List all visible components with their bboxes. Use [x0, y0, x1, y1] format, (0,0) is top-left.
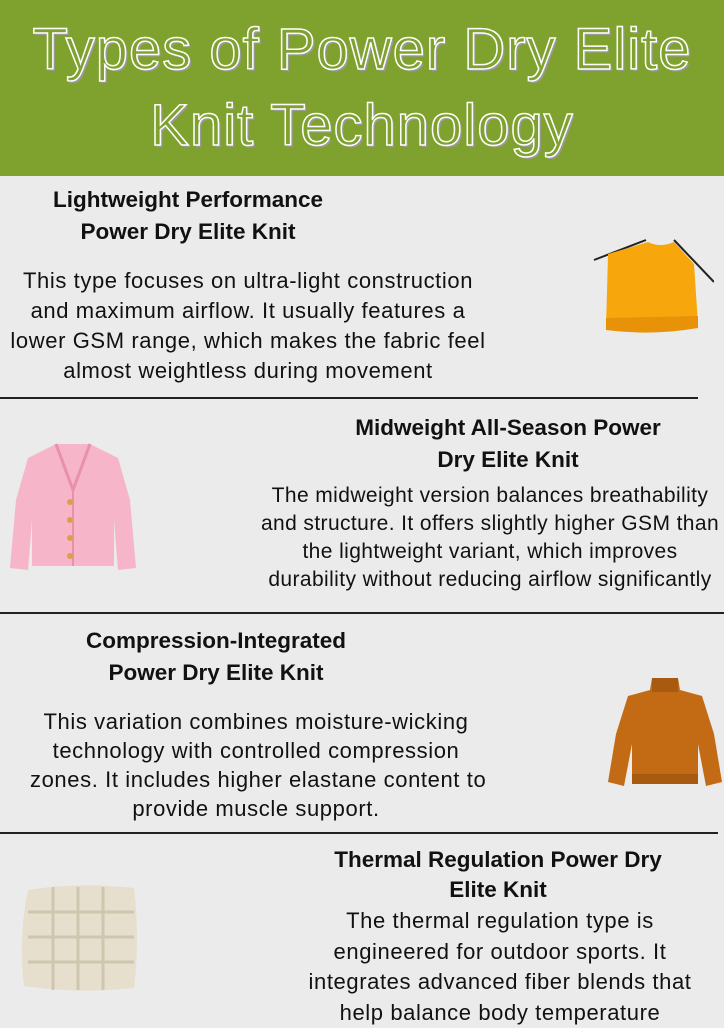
header banner: [0, 0, 724, 176]
title: Types of Power Dry Elite: [32, 17, 692, 82]
section 4 text: engineered for outdoor sports. It: [334, 938, 666, 964]
icon: beige fabric swatch: [22, 886, 137, 990]
section 4 heading: Thermal Regulation Power Dry: [334, 847, 662, 872]
section 2 text: and structure. It offers slightly higher GSM than: [261, 512, 719, 535]
section 4 text: integrates advanced fiber blends that: [308, 969, 692, 994]
section 4 heading: Elite Knit: [449, 877, 547, 902]
icon: knitting sweater with needles: [594, 239, 714, 333]
section 4 text: The thermal regulation type is: [346, 908, 654, 933]
section 1 text: [10, 268, 486, 383]
section 3 text: This variation combines moisture-wicking: [43, 709, 469, 734]
section 2 heading: [355, 415, 661, 472]
icon: pink cardigan: [10, 444, 136, 570]
section 3 text: zones. It includes higher elastane content to: [30, 767, 486, 792]
section 3 heading: Compression-Integrated: [86, 628, 346, 653]
section 1 heading: Lightweight Performance: [53, 187, 323, 212]
section 1 heading: [53, 187, 323, 244]
section 3 text: technology with controlled compression: [53, 738, 459, 763]
icon: brown turtleneck sweater: [608, 678, 722, 786]
section 2 heading: Midweight All-Season Power: [355, 415, 661, 440]
title: Knit Technology: [150, 93, 574, 158]
section 4 text: help balance body temperature: [340, 1000, 660, 1024]
section 1 heading: Power Dry Elite Knit: [80, 219, 296, 244]
section 1 text: lower GSM range, which makes the fabric feel: [10, 328, 486, 353]
section 4 heading: [334, 847, 662, 902]
title: [32, 17, 692, 159]
section 2 text: the lightweight variant, which improves: [302, 540, 678, 563]
section 1 text: and maximum airflow. It usually features a: [31, 298, 465, 323]
section 1 text: This type focuses on ultra-light construction: [23, 268, 473, 293]
section 3 text: [30, 709, 486, 821]
section 2 heading: Dry Elite Knit: [437, 447, 579, 472]
section 4 text: [308, 908, 692, 1024]
section 3 text: provide muscle support.: [132, 796, 380, 821]
section 2 text: [261, 484, 719, 591]
section 3 heading: Power Dry Elite Knit: [108, 660, 324, 685]
section 1 text: almost weightless during movement: [63, 358, 433, 383]
section 2 text: The midweight version balances breathability: [272, 484, 708, 507]
section 3 heading: [86, 628, 346, 685]
section 2 text: durability without reducing airflow significantly: [268, 568, 712, 591]
